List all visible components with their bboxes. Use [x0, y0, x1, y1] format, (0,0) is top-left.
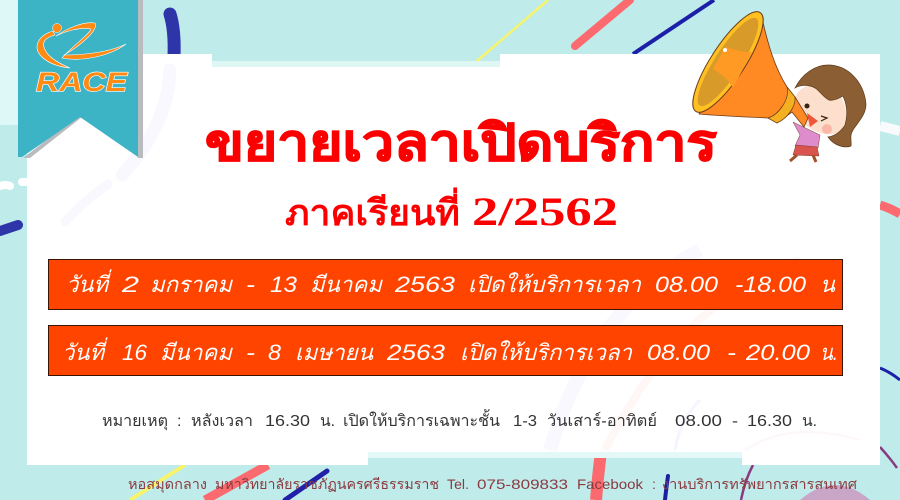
date bar 1: เปิดให้บริการเวลา	[468, 272, 642, 297]
icon: girl	[790, 65, 866, 162]
date bar 2: เปิดให้บริการเวลา	[460, 340, 633, 365]
subtitle: ภาคเรียนที่	[285, 187, 460, 233]
date bar 2: 2563	[386, 340, 446, 365]
footer contact line: :	[652, 476, 656, 492]
date bar 2: 08.00	[647, 340, 711, 365]
illustration: girl with megaphone	[682, 3, 866, 162]
date bar 2: วันที่	[62, 337, 108, 365]
footer contact line: งานบริการทรัพยากรสารสนเทศ	[662, 476, 857, 492]
date bar 2: 16	[122, 340, 148, 365]
note: หลังเวลา	[191, 413, 253, 430]
date bar 1: -18.00	[735, 272, 807, 297]
date bar 1: น	[820, 272, 836, 297]
note	[102, 409, 817, 431]
footer contact line: มหาวิทยาลัยราชภัฏนครศรีธรรมราช	[215, 476, 439, 492]
date bar 1: มกราคม	[150, 272, 234, 297]
note: น.	[320, 413, 335, 430]
note: 16.30	[747, 413, 792, 430]
icon: RACE logo: RACE	[36, 67, 128, 97]
note: 16.30	[265, 413, 310, 430]
white content panel	[27, 54, 880, 465]
date bar 1: 08.00	[655, 272, 719, 297]
footer contact line: 075-809833	[477, 476, 568, 492]
date bar 1: 13	[270, 272, 298, 297]
subtitle: 2/2562	[472, 189, 618, 234]
date bar 2: น.	[820, 340, 838, 365]
subtitle	[285, 187, 618, 234]
footer contact line: หอสมุดกลาง	[128, 476, 207, 493]
note: -	[732, 413, 738, 430]
note: :	[177, 413, 181, 430]
note: วันเสาร์-อาทิตย์	[547, 411, 657, 430]
note: 08.00	[675, 413, 722, 430]
date bar 2: -	[246, 340, 255, 365]
date bar 1: -	[246, 272, 255, 297]
title: ขยายเวลาเปิดบริการ	[205, 115, 717, 171]
date bar 1: 2	[121, 272, 139, 297]
footer contact line: Facebook	[577, 476, 644, 492]
footer contact line: Tel.	[447, 476, 469, 492]
icon: RACE logo	[36, 23, 128, 97]
ribbon bookmark with logo	[18, 0, 143, 158]
date bar 1: 2563	[394, 272, 456, 297]
date bar 1	[48, 260, 842, 310]
date bar 2: 20.00	[745, 340, 811, 365]
date bar 2: -	[727, 340, 736, 365]
date bar 1: มีนาคม	[310, 272, 384, 297]
date bar 2: เมษายน	[295, 340, 374, 365]
date bar 1: วันที่	[66, 269, 112, 297]
footer contact line	[128, 476, 857, 493]
note: เปิดให้บริการเฉพาะชั้น	[343, 409, 500, 430]
date bar 2: มีนาคม	[160, 340, 234, 365]
icon: megaphone horn	[682, 3, 808, 127]
date bar 2	[48, 326, 842, 376]
note: น.	[802, 413, 817, 430]
note: หมายเหตุ	[102, 413, 168, 431]
date bar 2: 8	[268, 340, 282, 365]
note: 1-3	[513, 413, 537, 430]
